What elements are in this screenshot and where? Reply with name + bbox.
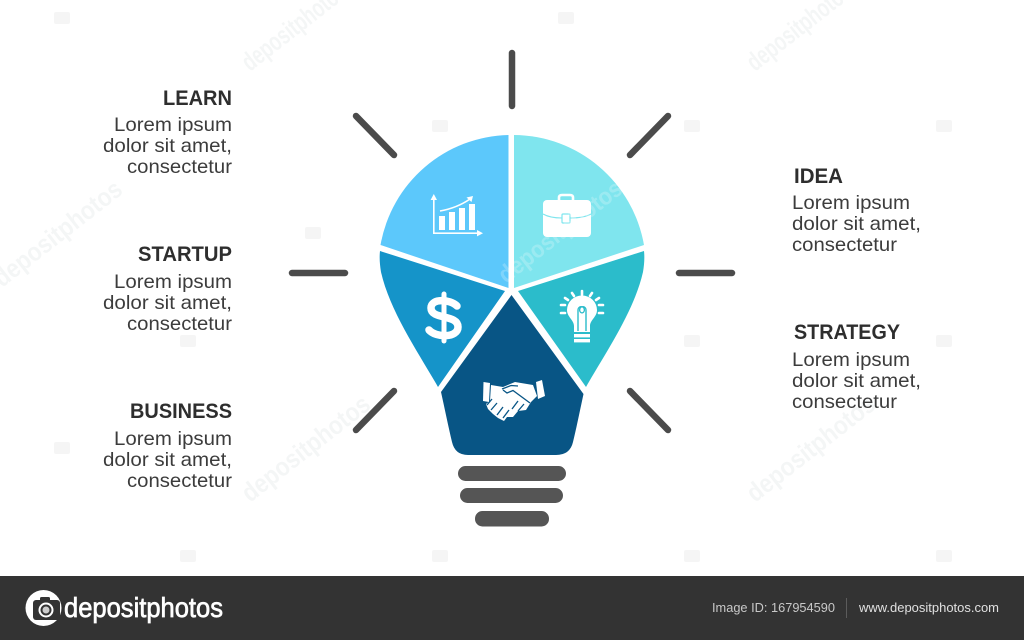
- label: business: Lorem ipsum: [114, 428, 232, 450]
- lightbulb diagram: [380, 135, 644, 455]
- label: startup: consectetur: [127, 313, 233, 335]
- label: strategy: dolor sit amet,: [792, 370, 921, 392]
- label: idea: IDEA: [794, 165, 843, 188]
- label: strategy: [792, 321, 921, 413]
- infographic canvas: depositphotos: [235, 389, 376, 508]
- label: business: consectetur: [127, 470, 233, 492]
- light rays: [292, 53, 732, 430]
- label: startup: STARTUP: [138, 243, 232, 266]
- icon: lightbulb: [561, 291, 603, 342]
- label: business: BUSINESS: [130, 400, 232, 423]
- website url: www.depositphotos.com: [858, 601, 999, 615]
- label: strategy: Lorem ipsum: [792, 349, 910, 371]
- bulb base: [458, 466, 566, 526]
- label: idea: consectetur: [792, 234, 898, 256]
- image id: Image ID: 167954590: [712, 601, 835, 615]
- icon: briefcase: [543, 195, 591, 237]
- label: startup: dolor sit amet,: [103, 292, 232, 314]
- label: learn: [103, 87, 233, 178]
- segment: startup: [380, 251, 505, 387]
- segment: idea: [514, 135, 644, 288]
- label: idea: dolor sit amet,: [792, 213, 921, 235]
- segment: business: [441, 295, 584, 455]
- segment: strategy: [518, 251, 644, 387]
- label: idea: Lorem ipsum: [792, 192, 910, 214]
- label: strategy: consectetur: [792, 391, 898, 413]
- label: startup: Lorem ipsum: [114, 271, 232, 293]
- icon: camera logo: [26, 590, 62, 626]
- segment: learn: [380, 135, 508, 288]
- label: strategy: STRATEGY: [794, 321, 900, 344]
- label: business: [103, 400, 233, 492]
- label: business: dolor sit amet,: [103, 449, 232, 471]
- logo wordmark: depositphotos: [64, 592, 223, 623]
- label: learn: LEARN: [163, 87, 232, 110]
- lightbulb diagram: depositphotos: [493, 175, 628, 289]
- label: idea: [792, 165, 921, 256]
- label: startup: [103, 243, 233, 335]
- footer bar: [0, 576, 1024, 640]
- icon: growth chart: [431, 194, 483, 236]
- label: learn: consectetur: [127, 156, 233, 178]
- label: learn: dolor sit amet,: [103, 135, 232, 157]
- infographic canvas: depositphotos: [740, 389, 881, 508]
- icon: handshake: [483, 380, 545, 421]
- icon: dollar sign: [429, 294, 458, 341]
- label: learn: Lorem ipsum: [114, 114, 232, 136]
